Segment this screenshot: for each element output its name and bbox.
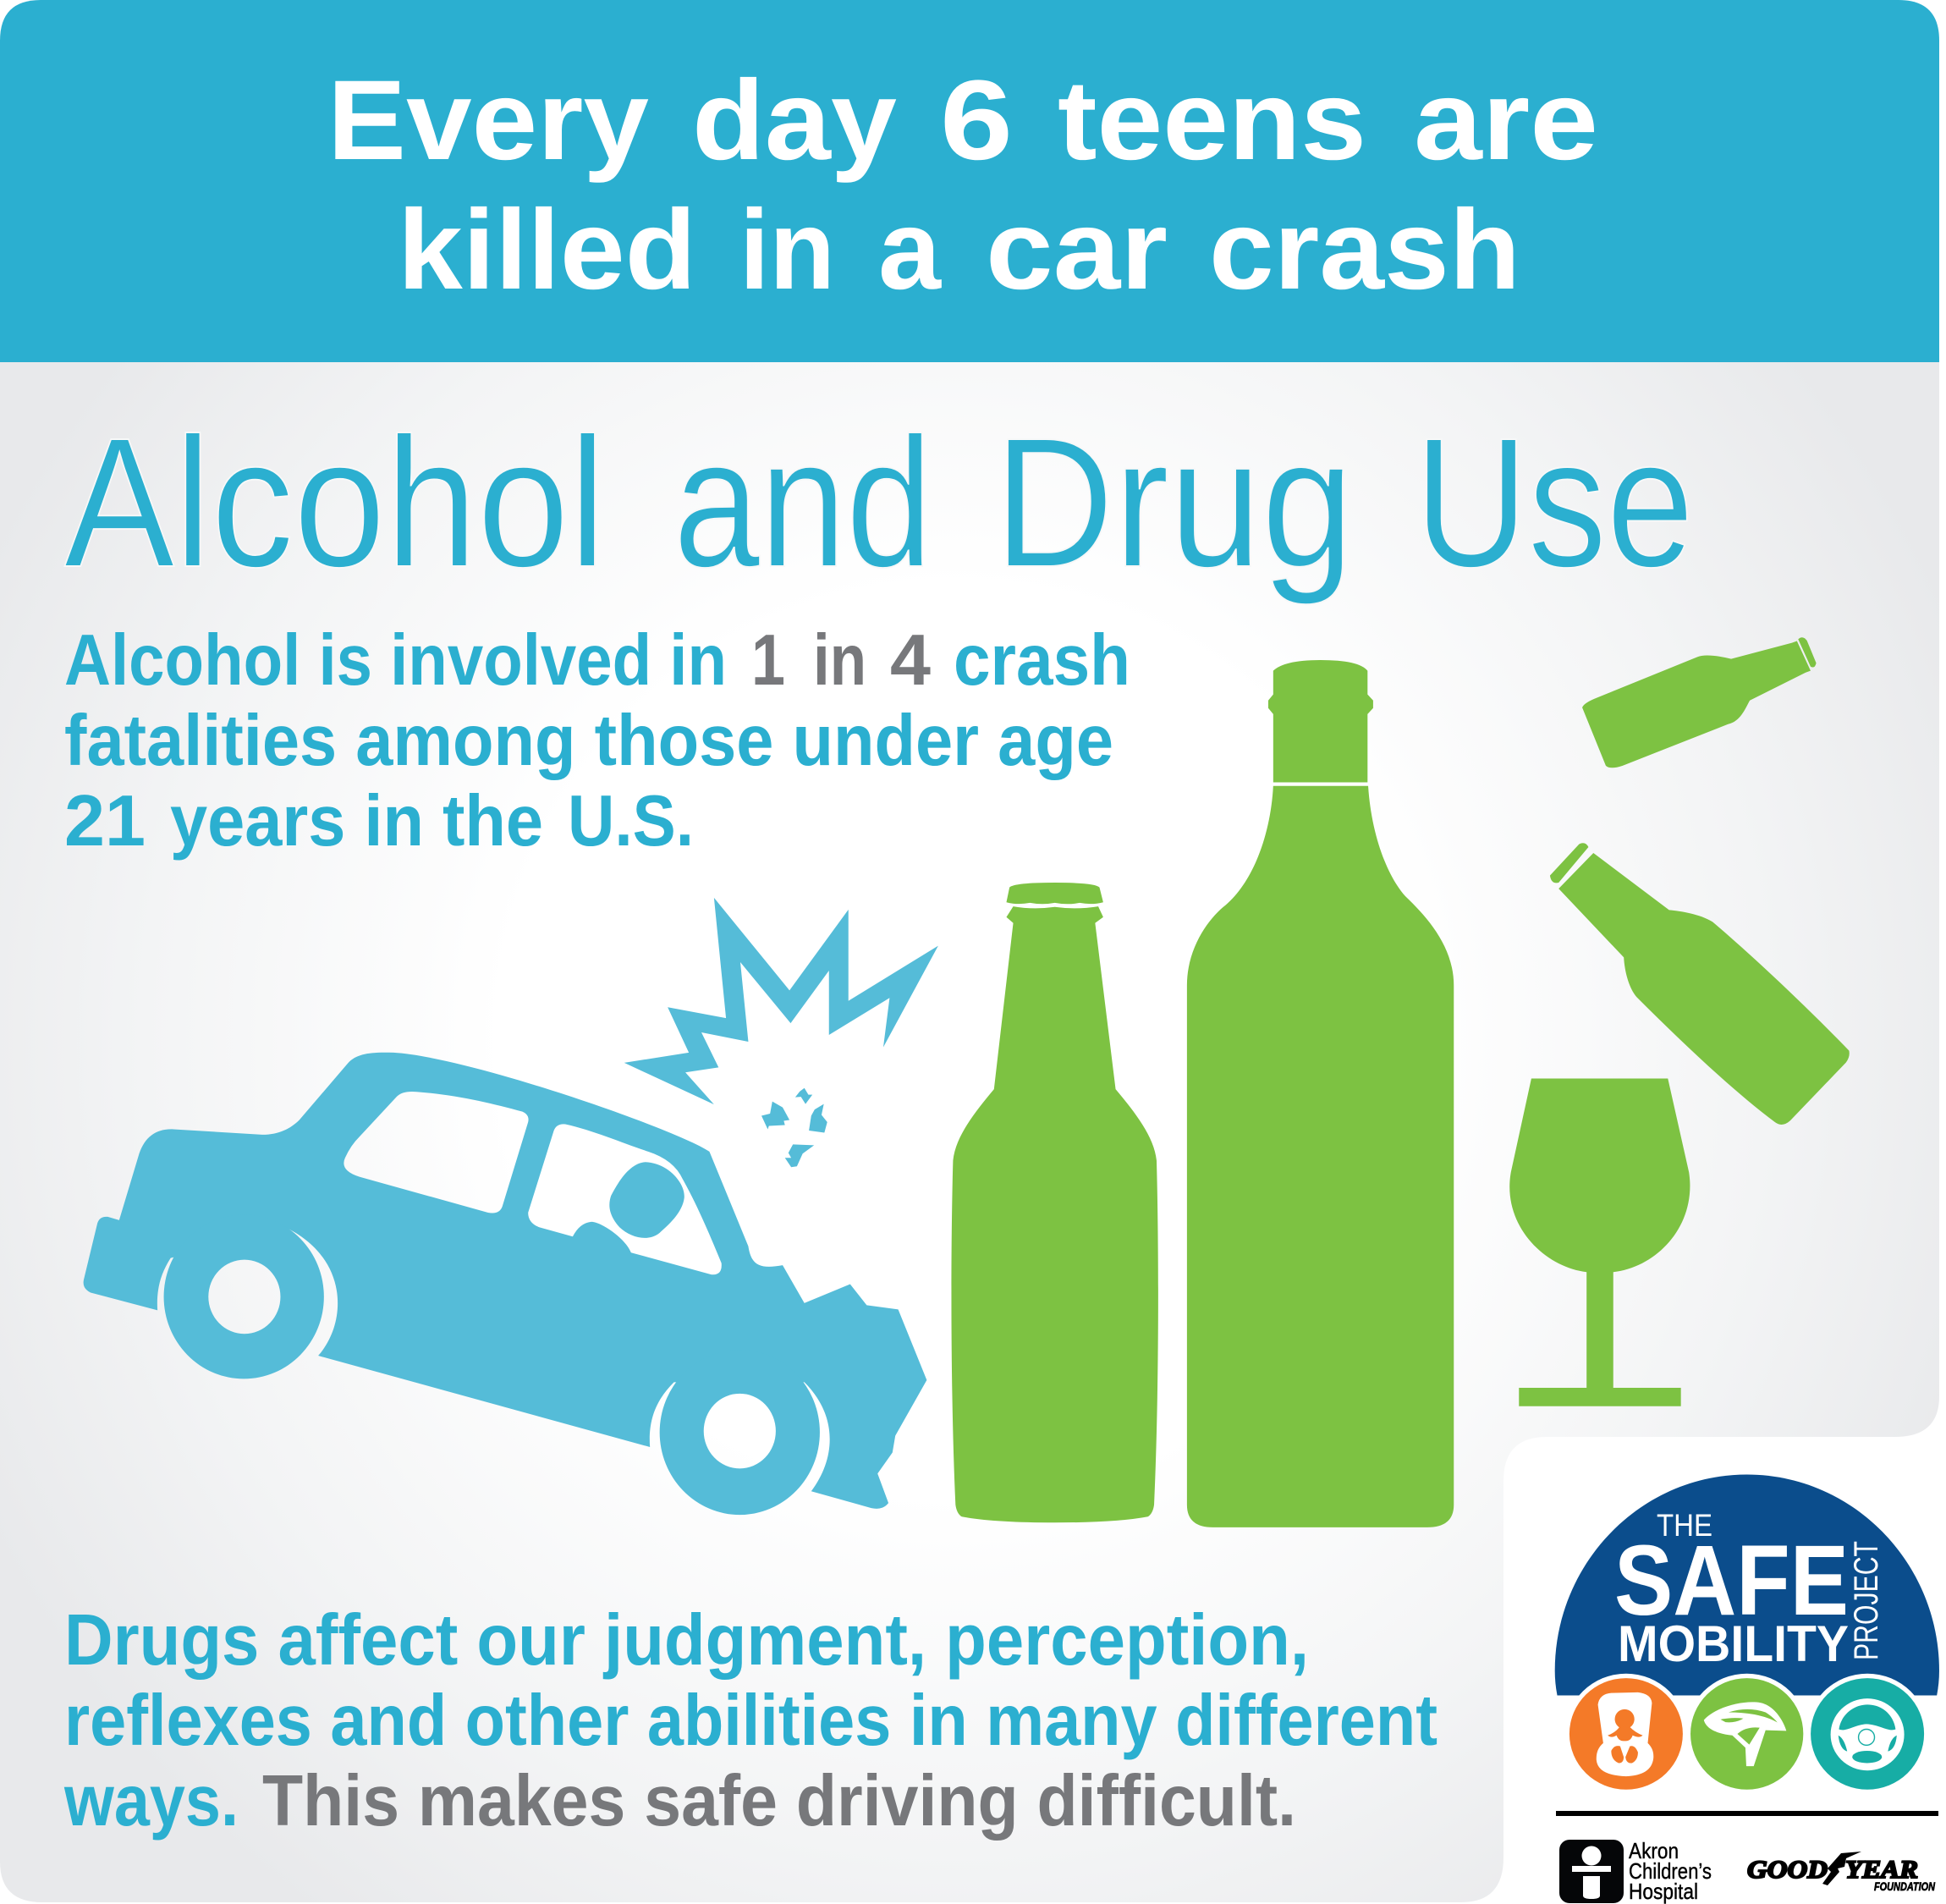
text block: alcohol statistic	[64, 620, 1130, 861]
title: Alcohol	[64, 400, 606, 606]
logo: akron children's hospital: Akron	[1629, 1838, 1679, 1863]
text block: alcohol statistic: 21	[64, 781, 146, 861]
text block: alcohol statistic: in	[813, 620, 866, 701]
text block: alcohol statistic: Alcohol is involved in	[64, 620, 727, 701]
text block: drugs: reflexes and other abilities in many different	[64, 1681, 1438, 1761]
logo: goodyear foundation	[1747, 1852, 1936, 1893]
icon: large wine bottle	[1187, 660, 1454, 1527]
logo: akron children's hospital	[1559, 1838, 1712, 1904]
icon: car seat	[1569, 1678, 1683, 1790]
icon: tilted bottle middle	[1550, 843, 1850, 1125]
text block: drugs: ways.	[63, 1761, 239, 1841]
icon: steering wheel	[1811, 1678, 1924, 1790]
heading: killed: crash	[1209, 187, 1520, 313]
logo: akron children's hospital: Hospital	[1629, 1879, 1698, 1904]
icon: crash burst	[624, 898, 938, 1167]
heading: every day	[327, 58, 1598, 184]
icon: bike helmet	[1690, 1678, 1803, 1790]
logo: goodyear foundation: GOOD	[1747, 1856, 1828, 1884]
heading: every day: teens	[1058, 58, 1366, 184]
logo text: THE: THE	[1657, 1508, 1712, 1543]
icon: crashed car	[84, 1053, 926, 1515]
heading: every day: day	[692, 58, 897, 184]
logo text: SAFE: SAFE	[1614, 1525, 1849, 1637]
text block: alcohol statistic: U.S.	[568, 781, 694, 861]
title: Drug	[994, 400, 1354, 606]
title	[64, 400, 1694, 606]
header banner	[0, 0, 1939, 362]
heading: every day: 6	[940, 58, 1013, 184]
icon: wine glass	[1509, 1079, 1690, 1406]
heading: every day: are	[1414, 58, 1598, 184]
logo: akron children's hospital: Children’s	[1629, 1858, 1712, 1884]
text block: drugs: This makes safe driving difficult.	[262, 1761, 1296, 1841]
heading: killed: killed	[398, 187, 696, 313]
heading: killed: car	[986, 187, 1168, 313]
text block: alcohol statistic: years in the	[170, 781, 543, 861]
logo: goodyear foundation: YEAR	[1845, 1856, 1918, 1884]
text block: alcohol statistic: 4	[890, 620, 931, 701]
text block: drugs	[63, 1600, 1438, 1841]
heading: killed	[398, 187, 1520, 313]
heading: killed: in	[739, 187, 835, 313]
heading: killed: a	[878, 187, 942, 313]
heading: every day: Every	[327, 58, 649, 184]
title: and	[673, 400, 932, 606]
logo text: MOBILITY: MOBILITY	[1618, 1615, 1849, 1672]
icon: tilted bottle top	[1582, 637, 1817, 768]
text block: alcohol statistic: 1	[751, 620, 785, 701]
icon: beer bottle	[951, 883, 1158, 1522]
logo: the safe mobility project	[1555, 1475, 1939, 1794]
text block: alcohol statistic: crash	[954, 620, 1130, 701]
divider rule	[1556, 1811, 1938, 1816]
title: Use	[1415, 400, 1694, 606]
logo text: PROJECT: PROJECT	[1848, 1541, 1885, 1660]
text block: drugs: Drugs affect our judgment, perception,	[64, 1600, 1309, 1681]
text block: alcohol statistic: fatalities among those under age	[64, 701, 1113, 781]
